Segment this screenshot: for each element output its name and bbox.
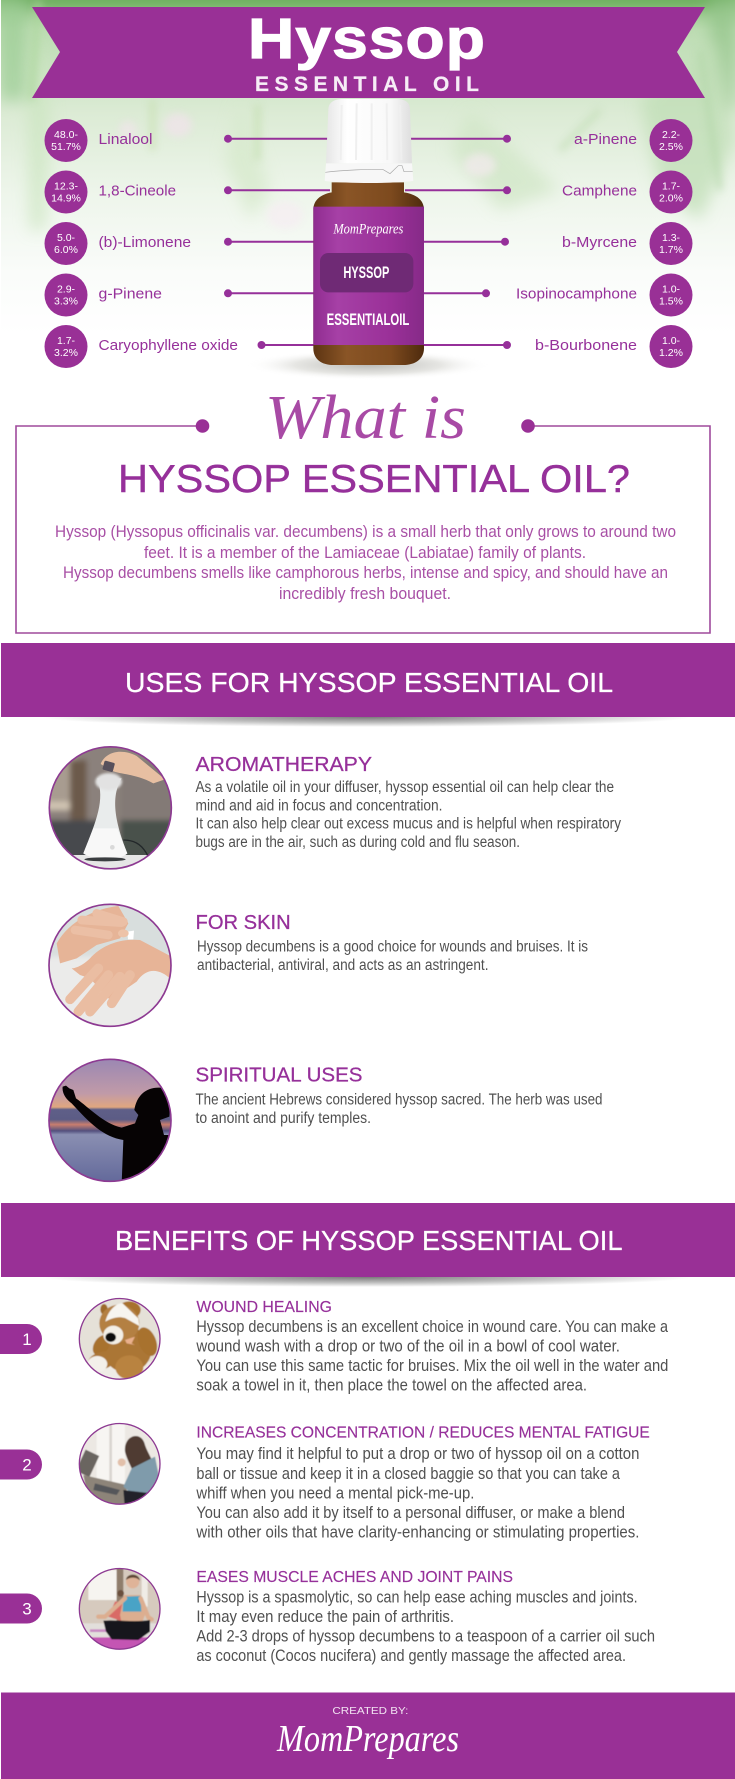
benefit 1: wound healing text <box>195 1299 669 1394</box>
photo: yoga women <box>78 1568 161 1650</box>
left compounds list: 1.7- <box>57 335 76 347</box>
number tab 2: 2 <box>22 1456 32 1474</box>
benefit 1: wound healing text: You can use this same tactic for bruises. Mix the oil well in the water and <box>196 1357 668 1375</box>
section banner: benefits: BENEFITS OF HYSSOP ESSENTIAL OIL <box>115 1225 622 1256</box>
bottle label text <box>327 221 409 329</box>
use: aromatherapy text: mind and aid in focus and concentration. <box>196 798 442 814</box>
right compounds list: 2.2- <box>662 129 681 141</box>
right compounds list: Camphene <box>562 182 637 200</box>
paragraph: Hyssop decumbens smells like camphorous herbs, intense and spicy, and should have an <box>63 564 668 582</box>
use: for skin text <box>196 912 588 974</box>
photo: spiritual silhouette <box>48 1058 172 1182</box>
right compounds list: Isopinocamphone <box>516 286 637 302</box>
photo: teddy bear <box>78 1298 161 1380</box>
banner shadow: uses <box>42 707 692 727</box>
number tab 3: 3 <box>22 1600 32 1618</box>
right compounds list: 1.0- <box>662 284 681 296</box>
use: spiritual uses text: to anoint and purify temples. <box>196 1110 371 1127</box>
right compounds list: b-Myrcene <box>562 234 637 251</box>
right compound connector lines <box>405 136 510 348</box>
section banner: benefits <box>1 1203 735 1277</box>
use: for skin text: FOR SKIN <box>196 912 291 934</box>
benefit 1: wound healing text: wound wash with a drop or two of the oil in a bowl of cool water. <box>195 1338 620 1356</box>
right compounds list: 1.3- <box>662 232 681 244</box>
use: for skin text: antibacterial, antiviral, and acts as an astringent. <box>197 957 488 974</box>
use: aromatherapy text: As a volatile oil in your diffuser, hyssop essential oil can help clear the <box>196 779 614 796</box>
bottle illustration <box>313 99 424 365</box>
footer credit label: CREATED BY: <box>332 1705 408 1717</box>
benefit 2: concentration text <box>195 1424 650 1542</box>
bottle shadow <box>246 350 490 380</box>
bottle label text: HYSSOP <box>343 263 389 282</box>
use: spiritual uses text <box>196 1064 602 1127</box>
left compounds list: 12.3- <box>54 180 78 192</box>
benefit 2: concentration text: with other oils that have clarity-enhancing or stimulating properties. <box>195 1524 639 1542</box>
section banner: uses <box>1 643 735 717</box>
benefit 3: muscle aches text: Add 2-3 drops of hyssop decumbens to a teaspoon of a carrier oil such <box>196 1628 655 1646</box>
benefit 3: muscle aches text: EASES MUSCLE ACHES AND JOINT PAINS <box>196 1569 513 1586</box>
paragraph <box>55 523 676 603</box>
right compounds list: 1.7% <box>659 244 683 256</box>
number tab 2 <box>0 1450 42 1480</box>
subtitle: essential oil: ESSENTIAL OIL <box>255 73 479 96</box>
heading: What is: What is <box>265 384 466 452</box>
title: Hyssop: Hyssop <box>248 7 486 71</box>
benefit 2: concentration text: You can also add it by itself to a personal diffuser, or make a blend <box>196 1504 625 1522</box>
left compounds list: 48.0- <box>54 129 78 141</box>
banner shadow: benefits <box>42 1267 692 1287</box>
left compounds list <box>44 119 238 368</box>
photo: diffuser <box>48 746 172 870</box>
benefit 3: muscle aches text: It may even reduce the pain of arthritis. <box>196 1608 454 1626</box>
number tab 3 <box>0 1594 42 1624</box>
left compounds list: 14.9% <box>51 192 81 204</box>
panel: what is hyssop essential oil <box>16 384 710 633</box>
benefit 1: wound healing text: soak a towel in it, then place the towel on the affected area. <box>196 1376 587 1394</box>
use: aromatherapy text: It can also help clear out excess mucus and is helpful when respiratory <box>196 816 621 832</box>
use: aromatherapy text: AROMATHERAPY <box>196 754 372 776</box>
right compounds list: 1.5% <box>659 296 683 308</box>
right compounds list: b-Bourbonene <box>535 337 637 354</box>
header background: blurred hyssop plants <box>1 0 735 258</box>
use: aromatherapy text: bugs are in the air, such as during cold and flu season. <box>196 834 520 851</box>
paragraph: Hyssop (Hyssopus officinalis var. decumbens) is a small herb that only grows to around two <box>55 523 676 541</box>
title ribbon banner <box>32 7 705 98</box>
left compound connector lines <box>225 136 330 348</box>
left compounds list: 5.0- <box>57 232 76 244</box>
left compounds list: 3.3% <box>54 296 78 308</box>
left compounds list: g-Pinene <box>98 286 162 302</box>
paragraph: incredibly fresh bouquet. <box>279 585 451 603</box>
use: for skin text: Hyssop decumbens is a good choice for wounds and bruises. It is <box>197 938 588 956</box>
benefit 1: wound healing text: WOUND HEALING <box>196 1299 332 1316</box>
benefit 2: concentration text: ball or tissue and keep it in a closed baggie so that you can take a <box>196 1465 621 1483</box>
right compounds list <box>516 119 692 368</box>
left compounds list: 2.9- <box>57 284 76 296</box>
footer logo text: MomPrepares <box>276 1718 459 1760</box>
right compounds list: 1.2% <box>659 347 683 359</box>
photo: skin hands <box>48 904 172 1028</box>
use: spiritual uses text: SPIRITUAL USES <box>196 1064 362 1086</box>
benefit 1: wound healing text: Hyssop decumbens is an excellent choice in wound care. You can make a <box>196 1318 669 1336</box>
footer <box>1 1692 735 1779</box>
left compounds list: Linalool <box>98 131 152 148</box>
left compounds list: 51.7% <box>51 141 81 153</box>
right compounds list: 1.0- <box>662 335 681 347</box>
right compounds list: 2.5% <box>659 141 683 153</box>
benefit 3: muscle aches text: Hyssop is a spasmolytic, so can help ease aching muscles and joints. <box>196 1588 638 1606</box>
left compounds list: (b)-Limonene <box>98 234 191 251</box>
bottle label text: MomPrepares <box>332 221 404 237</box>
left compounds list: 3.2% <box>54 347 78 359</box>
right compounds list: 2.0% <box>659 192 683 204</box>
photo: woman at desk <box>78 1422 161 1505</box>
benefit 3: muscle aches text <box>196 1569 655 1665</box>
number tab 1: 1 <box>22 1330 32 1349</box>
benefit 3: muscle aches text: as coconut (Cocos nucifera) and gently massage the affected area. <box>196 1647 626 1665</box>
number tab 1 <box>0 1324 42 1354</box>
heading: Hyssop essential oil?: HYSSOP ESSENTIAL OIL? <box>118 458 630 501</box>
left compounds list: 6.0% <box>54 244 78 256</box>
section banner: uses: USES FOR HYSSOP ESSENTIAL OIL <box>125 667 613 698</box>
right compounds list: 1.7- <box>662 180 681 192</box>
benefit 2: concentration text: INCREASES CONCENTRATION / REDUCES MENTAL FATIGUE <box>196 1424 650 1442</box>
left compounds list: Caryophyllene oxide <box>98 337 238 354</box>
benefit 2: concentration text: You may find it helpful to put a drop or two of hyssop oil on a cotton <box>196 1445 639 1463</box>
use: spiritual uses text: The ancient Hebrews considered hyssop sacred. The herb was used <box>196 1092 602 1108</box>
benefit 2: concentration text: whiff when you need a mental pick-me-up. <box>195 1484 474 1502</box>
bottle label text: ESSENTIALOIL <box>327 310 409 329</box>
paragraph: feet. It is a member of the Lamiaceae (Labiatae) family of plants. <box>144 544 586 562</box>
right compounds list: a-Pinene <box>574 131 637 148</box>
left compounds list: 1,8-Cineole <box>98 182 176 200</box>
use: aromatherapy text <box>196 754 621 851</box>
